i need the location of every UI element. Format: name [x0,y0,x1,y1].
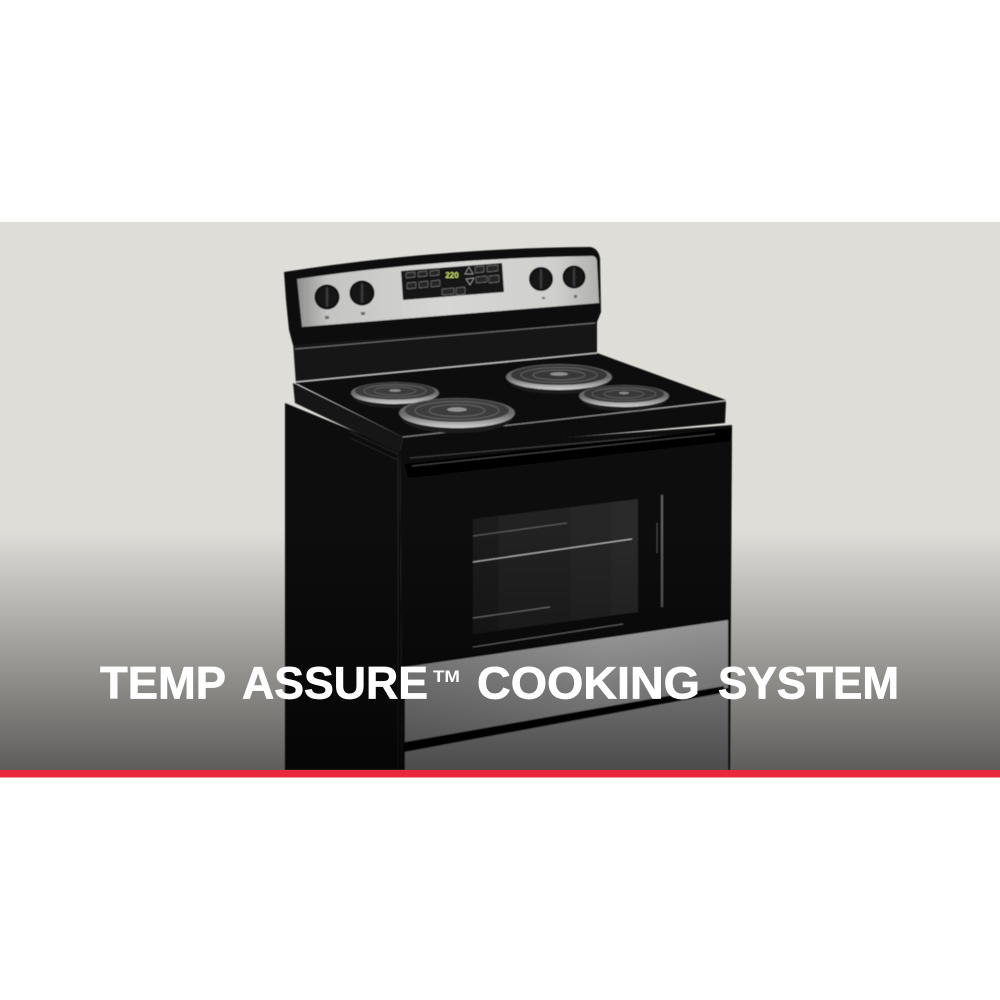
burner back left [351,382,439,408]
title: TEMP [100,658,226,708]
burner front right [579,385,669,411]
oven door top trim [410,430,730,458]
knob position marks [325,295,577,319]
burner back right [506,364,612,394]
title [100,658,899,708]
oven door handle highlight [412,434,715,466]
oven door [405,443,728,667]
knob left outer [314,284,340,310]
knob right inner [529,267,553,291]
stainless drawer [405,692,728,770]
cooktop front edge [400,401,726,453]
backguard highlight lines [295,323,597,382]
title: TM [433,667,460,686]
range front body [400,425,732,770]
oven rack lines [473,523,632,647]
oven door vertical reflection [657,495,662,607]
drawer handle [403,686,724,752]
background band [0,222,1000,770]
clock digits: 220 [445,271,459,280]
range side panel vent ridges [350,432,398,770]
oven door handle [405,428,732,478]
title: ASSURE [242,658,428,708]
bottom gradient shade [0,530,1000,770]
control panel housing [284,247,601,345]
oven window [473,499,638,634]
control display panel [401,263,504,300]
arrow up and down buttons [465,267,474,285]
title: COOKING [477,658,700,708]
knob right outer [562,266,586,288]
backguard [293,320,597,384]
cooktop front edge highlight [403,401,726,437]
stainless door panel [405,620,728,744]
range illustration [284,247,732,770]
cooktop left apron [293,383,403,453]
burner front left [399,398,515,433]
knob left inner [350,280,374,306]
red bottom bar [0,770,1000,778]
title: SYSTEM [718,658,899,708]
stainless control panel [297,256,599,327]
cooktop surface [296,353,726,437]
touch buttons [406,265,499,295]
range side panel [285,403,402,770]
